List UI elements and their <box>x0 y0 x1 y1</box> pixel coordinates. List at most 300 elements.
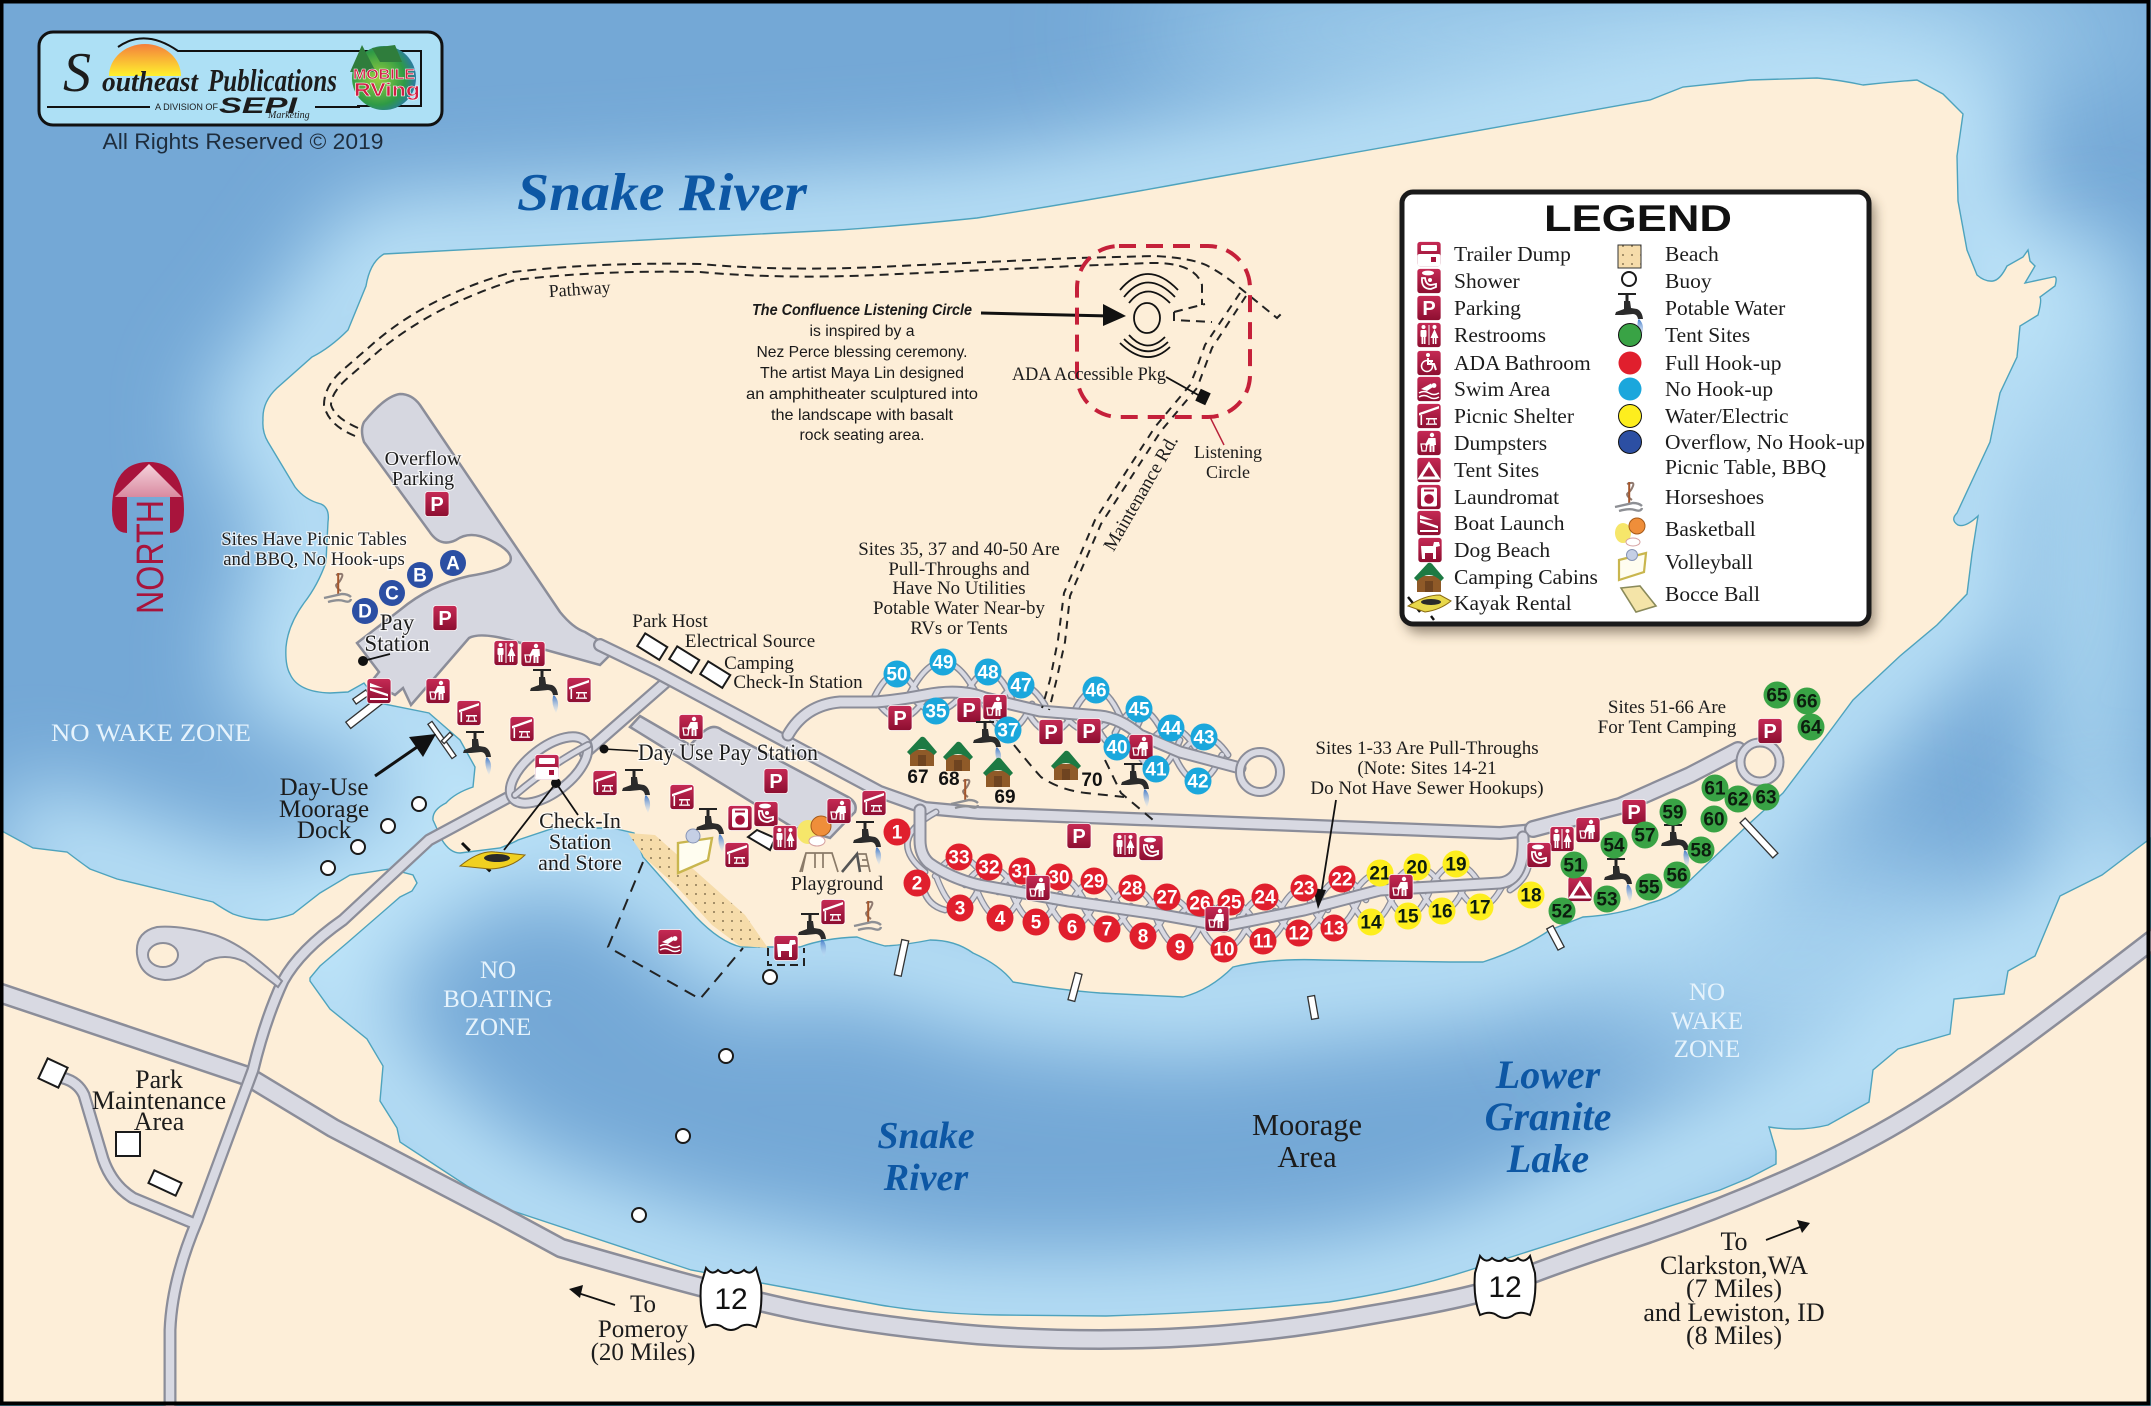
icon: highway shield 12 west <box>701 1268 761 1330</box>
land: north peninsula <box>263 78 2056 997</box>
arrow to pomeroy <box>569 1285 615 1305</box>
site 9: 9 <box>1175 938 1185 958</box>
label: to clarkston and lewiston: To <box>1720 1227 1748 1256</box>
legend: left labels: Parking <box>1454 296 1521 320</box>
site 49 <box>930 648 956 676</box>
label: picnic tables note: Sites Have Picnic Tables <box>221 529 407 550</box>
parking icons: P <box>1044 722 1058 744</box>
site 4: 4 <box>995 908 1006 930</box>
icon: kayak rental <box>460 843 525 879</box>
site 30 <box>1046 864 1072 890</box>
label: pathway: Pathway <box>548 277 611 301</box>
site 60 <box>1700 806 1728 832</box>
legend: right labels: Water/Electric <box>1665 404 1789 428</box>
legend: left labels: Camping Cabins <box>1454 565 1598 589</box>
site 40: 40 <box>1106 738 1128 758</box>
land: south and west shore <box>0 830 2151 1406</box>
arrow to moorage dock <box>375 734 436 776</box>
logo: Publications <box>207 62 337 98</box>
site C: C <box>385 584 399 604</box>
parking icons <box>425 492 1782 848</box>
site 63: 63 <box>1755 788 1777 808</box>
site 66: 66 <box>1796 692 1818 712</box>
site 28 <box>1118 874 1146 902</box>
sites: full hook-up <box>884 818 1356 962</box>
site 53: 53 <box>1596 890 1618 910</box>
site 10 <box>1210 936 1238 962</box>
legend title: LEGEND <box>1544 198 1732 239</box>
label: to clarkston and lewiston: Clarkston,WA <box>1660 1251 1808 1280</box>
label: maintenance road: Maintenance Rd. <box>1100 432 1183 555</box>
site 62 <box>1724 786 1752 812</box>
legend: left labels: Picnic Shelter <box>1454 404 1574 428</box>
site 58 <box>1688 836 1714 864</box>
label: snake river south: River <box>883 1157 969 1199</box>
site 51: 51 <box>1563 856 1585 876</box>
road: US highway 12 <box>0 938 2151 1339</box>
arrow to clarkston <box>1766 1220 1810 1240</box>
site 41 <box>1142 756 1170 782</box>
site 33: 33 <box>948 848 970 868</box>
site 31: 31 <box>1011 862 1033 882</box>
site 16: 16 <box>1431 902 1453 922</box>
dumpster icons over roads <box>1026 874 1413 932</box>
label: check-in station: Check-In Station <box>733 672 863 693</box>
label: playground: Playground <box>791 873 883 895</box>
label: overflow parking: Parking <box>392 468 454 490</box>
site 13: 13 <box>1323 918 1345 940</box>
site 5: 5 <box>1031 912 1042 934</box>
site 2 <box>904 870 930 896</box>
site B: B <box>413 566 427 586</box>
site 23: 23 <box>1293 878 1315 900</box>
site 51 <box>1560 852 1588 878</box>
site 42 <box>1184 768 1212 794</box>
sites text: sites 35, 37, 40-50 note: Pull-Throughs and <box>888 559 1030 580</box>
site 45 <box>1126 696 1152 722</box>
camping cabins: 69 <box>994 787 1016 808</box>
legend: right labels: Picnic Table, BBQ <box>1665 455 1827 479</box>
logo: Marketing <box>267 110 310 121</box>
pathway and maintenance road <box>324 256 1283 820</box>
horseshoe pits <box>324 573 978 930</box>
day use pay station marker <box>600 744 638 754</box>
legend: right labels: Basketball <box>1665 517 1756 541</box>
map amenity icons <box>367 640 1600 960</box>
beach <box>628 833 768 948</box>
logo: SEPI <box>219 93 298 118</box>
parking icons: P <box>1072 826 1086 848</box>
legend: right icons <box>1615 245 1656 612</box>
label: day-use moorage dock: Moorage <box>279 796 369 823</box>
sites text: confluence listening circle note: The artist Maya Lin designed <box>760 365 964 382</box>
site 28: 28 <box>1121 878 1143 900</box>
site 56: 56 <box>1666 866 1688 886</box>
labels: park maintenance area: Maintenance <box>92 1086 226 1115</box>
label: listening circle: Circle <box>1206 462 1250 482</box>
legend: right labels: No Hook-up <box>1665 377 1773 401</box>
site 46: 46 <box>1085 680 1107 702</box>
arrow to listening circle <box>981 304 1126 326</box>
check-in marker lines <box>504 778 578 850</box>
road: park entrance and maintenance area <box>63 683 665 1406</box>
legend: left icons <box>1408 242 1451 620</box>
boat docks <box>346 690 1778 1019</box>
north arrow: NORTH <box>130 500 172 614</box>
sites text: sites 35, 37, 40-50 note: Have No Utilities <box>892 578 1026 599</box>
logo: outheast <box>102 67 199 98</box>
label: day use pay station: Day Use Pay Station <box>638 740 818 766</box>
label: sites 1-33 note: Do Not Have Sewer Hookups) <box>1310 778 1544 799</box>
site 6: 6 <box>1067 918 1077 938</box>
labels: park maintenance area: Park <box>135 1065 183 1094</box>
site 8: 8 <box>1138 926 1148 948</box>
site 60: 60 <box>1703 810 1725 830</box>
site 20: 20 <box>1406 858 1428 878</box>
label: check-in station and store: and Store <box>538 850 622 875</box>
legend: left labels: Boat Launch <box>1454 511 1565 535</box>
site 65: 65 <box>1766 686 1788 706</box>
site D: D <box>358 602 372 622</box>
site 62: 62 <box>1727 790 1749 810</box>
label: tent camping note: For Tent Camping <box>1598 717 1737 738</box>
label: day-use moorage dock: Day-Use <box>280 774 368 801</box>
label: no wake zone west: NO WAKE ZONE <box>51 720 251 747</box>
site 18 <box>1518 882 1544 908</box>
legend: right labels: Buoy <box>1665 269 1712 293</box>
parking icons: P <box>1627 802 1641 824</box>
legend: left labels: Dumpsters <box>1454 431 1547 455</box>
ADA parking marker <box>1166 377 1211 405</box>
site 59: 59 <box>1662 802 1684 824</box>
site 9 <box>1166 934 1194 960</box>
site 48: 48 <box>977 662 999 684</box>
sites: overflow A-D <box>352 550 466 624</box>
site 46 <box>1082 676 1110 704</box>
site 43 <box>1190 724 1218 750</box>
pay station marker <box>363 654 390 661</box>
camping cabins <box>907 737 1103 808</box>
site 48 <box>974 658 1002 686</box>
legend: left labels: Dog Beach <box>1454 538 1550 562</box>
site 3 <box>946 894 974 922</box>
site 1 <box>884 818 910 846</box>
site 55 <box>1636 874 1662 900</box>
pay station dot <box>358 656 368 666</box>
label: no wake zone east: WAKE <box>1671 1008 1743 1035</box>
site 17 <box>1466 894 1494 920</box>
site 15 <box>1394 902 1422 930</box>
parking icons: P <box>893 708 907 730</box>
site 2: 2 <box>912 874 922 894</box>
site 35: 35 <box>925 702 947 722</box>
label: tent camping note: Sites 51-66 Are <box>1608 697 1726 718</box>
site 61: 61 <box>1704 778 1726 800</box>
label: to clarkston and lewiston: and Lewiston, ID <box>1643 1298 1825 1327</box>
site 13 <box>1320 914 1348 942</box>
site 52 <box>1548 898 1576 924</box>
site 58: 58 <box>1690 840 1712 862</box>
site 6 <box>1058 914 1086 940</box>
listening circle dashed boundary <box>1077 246 1250 417</box>
legend: right labels <box>1665 242 1865 606</box>
legend: right labels: Volleyball <box>1665 550 1753 574</box>
icon: volleyball <box>678 829 712 873</box>
site 14 <box>1358 908 1384 936</box>
sites text: confluence listening circle note: The Confluence Listening Circle <box>752 302 972 319</box>
legend: left labels: Kayak Rental <box>1454 591 1572 615</box>
site 37: 37 <box>997 720 1019 742</box>
label: camping: Camping <box>724 653 794 674</box>
site 66 <box>1794 688 1820 714</box>
site 63 <box>1752 784 1780 810</box>
site 57 <box>1632 822 1658 848</box>
site 24 <box>1252 884 1278 910</box>
sites text: confluence listening circle note: rock seating area. <box>800 427 924 444</box>
site 49: 49 <box>932 652 954 674</box>
label: no wake zone east: ZONE <box>1674 1036 1740 1063</box>
site 65 <box>1764 682 1790 708</box>
site 14: 14 <box>1360 912 1382 934</box>
site 1: 1 <box>892 822 903 844</box>
icon: highway shield 12 east <box>1475 1256 1535 1318</box>
site 4 <box>986 904 1014 932</box>
camping cabins: 67 <box>907 767 929 788</box>
site 43: 43 <box>1193 728 1215 748</box>
logo: MOBILE <box>353 66 415 83</box>
site 54 <box>1600 832 1628 858</box>
site 25: 25 <box>1220 892 1242 914</box>
site 50 <box>884 660 910 688</box>
parking icons: P <box>1082 721 1096 743</box>
site 7: 7 <box>1102 920 1112 940</box>
day use lot <box>630 716 856 838</box>
legend: left labels: Tent Sites <box>1454 458 1539 482</box>
site 18: 18 <box>1520 886 1542 906</box>
site 29: 29 <box>1083 872 1105 892</box>
sites text: sites 35, 37, 40-50 note: Sites 35, 37 and 40-50 Are <box>858 539 1060 560</box>
site 31 <box>1008 858 1036 884</box>
site 22: 22 <box>1331 870 1353 890</box>
site 11: 11 <box>1253 932 1273 952</box>
arrow to sites 1-33 <box>1313 800 1336 909</box>
site 53 <box>1594 886 1620 912</box>
site 27 <box>1154 884 1180 910</box>
label: to pomeroy: Pomeroy <box>598 1316 689 1343</box>
sites text: confluence listening circle note <box>746 302 978 444</box>
site 10: 10 <box>1213 940 1235 960</box>
site 56 <box>1664 862 1690 888</box>
site 8 <box>1130 922 1156 950</box>
legend: left labels: Trailer Dump <box>1454 242 1571 266</box>
legend: right labels: Horseshoes <box>1665 485 1764 509</box>
label: sites 1-33 note: (Note: Sites 14-21 <box>1357 758 1497 779</box>
site 27: 27 <box>1156 888 1178 908</box>
site 35 <box>922 698 950 724</box>
site 12 <box>1286 920 1312 946</box>
site 21: 21 <box>1369 864 1391 884</box>
label: no boating zone: BOATING <box>443 986 553 1013</box>
site 29 <box>1080 868 1108 894</box>
site 21 <box>1366 860 1394 886</box>
label: listening circle: Listening <box>1194 442 1262 462</box>
icon: highway shield 12 east: 12 <box>1488 1271 1522 1304</box>
sites text: confluence listening circle note: Nez Perce blessing ceremony. <box>756 344 968 361</box>
label: to clarkston and lewiston: (8 Miles) <box>1686 1321 1782 1350</box>
site 19: 19 <box>1445 854 1467 876</box>
site 17: 17 <box>1469 898 1491 918</box>
label: check-in station and store: Station <box>549 829 611 854</box>
label: sites 1-33 note: Sites 1-33 Are Pull-Throughs <box>1315 738 1539 759</box>
label: lower granite lake: Lower <box>1496 1052 1600 1097</box>
site 61 <box>1702 774 1728 802</box>
label: lower granite lake: Lake <box>1506 1136 1589 1181</box>
label: electrical source: Electrical Source <box>685 631 815 652</box>
parking icons: P <box>769 771 783 793</box>
legend: left labels: Restrooms <box>1454 323 1546 347</box>
parking icons: P <box>962 700 976 722</box>
site 44 <box>1158 714 1184 742</box>
road: north loop with pull-through sites 35-50 <box>788 662 1280 792</box>
road: tent and RV loop with pull-through sites 1-33 <box>907 810 1529 949</box>
label: no wake zone east: NO <box>1689 979 1725 1006</box>
site 15: 15 <box>1397 906 1419 928</box>
sites: water and electric <box>1358 850 1544 936</box>
site 44: 44 <box>1160 718 1182 740</box>
label: day-use moorage dock: Dock <box>297 817 352 844</box>
site 33 <box>946 844 972 870</box>
north arrow <box>112 462 184 614</box>
legend: right labels: Potable Water <box>1665 296 1785 320</box>
label: no boating zone: NO <box>480 957 516 984</box>
label: to pomeroy: To <box>630 1291 656 1318</box>
legend: right labels: Beach <box>1665 242 1719 266</box>
logo: RVing <box>354 80 420 100</box>
potable water faucets <box>463 669 1689 957</box>
site 37 <box>994 716 1022 744</box>
parking icons: P <box>438 608 452 630</box>
overflow parking and main lot <box>357 394 615 705</box>
icon: playground equipment <box>800 853 870 872</box>
site 42: 42 <box>1187 772 1209 792</box>
site 55: 55 <box>1638 878 1660 898</box>
label: pay station: Station <box>364 631 430 656</box>
sites text: sites 35, 37, 40-50 note: RVs or Tents <box>910 618 1008 639</box>
logo <box>39 32 442 125</box>
site 32: 32 <box>978 858 1000 878</box>
site 24: 24 <box>1254 888 1276 908</box>
legend: left labels: Shower <box>1454 269 1520 293</box>
site 19 <box>1442 850 1470 878</box>
label: moorage area: Moorage <box>1252 1108 1362 1142</box>
site 7 <box>1094 916 1120 942</box>
legend: right labels: Bocce Ball <box>1665 582 1760 606</box>
legend: right labels: Full Hook-up <box>1665 351 1781 375</box>
label: park host: Park Host <box>632 611 708 632</box>
label: moorage area: Area <box>1277 1140 1337 1174</box>
site 32 <box>976 854 1002 880</box>
sites: no hook-up <box>884 648 1218 794</box>
label: to pomeroy: (20 Miles) <box>591 1339 695 1366</box>
logo: S <box>63 42 91 104</box>
logo: A DIVISION OF <box>155 102 219 112</box>
label: ADA accessible parking: ADA Accessible Pkg <box>1012 364 1166 385</box>
icon: highway shield 12 west: 12 <box>714 1283 748 1316</box>
site 47: 47 <box>1010 676 1032 696</box>
legend: right labels: Overflow, No Hook-up <box>1665 430 1865 454</box>
label: picnic tables note: and BBQ, No Hook-ups <box>223 549 405 570</box>
site 23 <box>1290 874 1318 902</box>
legend: left labels: ADA Bathroom <box>1454 351 1591 375</box>
site A: A <box>446 554 460 574</box>
site 50: 50 <box>886 664 908 686</box>
panel: legend <box>1402 192 1875 633</box>
sites text: confluence listening circle note: is inspired by a <box>810 323 915 340</box>
label: to clarkston and lewiston: (7 Miles) <box>1686 1274 1782 1303</box>
site 3: 3 <box>955 898 965 920</box>
copyright: All Rights Reserved © 2019 <box>102 129 384 154</box>
label: overflow parking: Overflow <box>385 448 461 470</box>
icon: listening circle amphitheater <box>1120 274 1178 357</box>
camping cabins: 68 <box>938 769 960 790</box>
legend: right labels: Tent Sites <box>1665 323 1750 347</box>
site 12: 12 <box>1288 924 1310 944</box>
site 54: 54 <box>1603 836 1625 856</box>
site 30: 30 <box>1048 868 1070 888</box>
labels: park maintenance area: Area <box>134 1107 185 1136</box>
buoys <box>321 797 777 1222</box>
heading: Snake River north: Snake River <box>517 164 808 222</box>
label: check-in station and store: Check-In <box>539 808 621 833</box>
dashed swim area <box>608 862 743 999</box>
site 47 <box>1008 672 1034 698</box>
legend: left labels: Swim Area <box>1454 377 1551 401</box>
parking icons: P <box>430 494 444 516</box>
sites text: sites 35, 37, 40-50 note: Potable Water Near-by <box>873 598 1045 619</box>
site 64: 64 <box>1800 718 1822 738</box>
site 11 <box>1250 928 1276 954</box>
site 26: 26 <box>1189 894 1211 914</box>
sites text: confluence listening circle note: an amphitheater sculptured into <box>746 386 978 403</box>
site 5 <box>1022 908 1050 936</box>
site 25 <box>1218 888 1244 916</box>
icon: basketball <box>797 816 831 846</box>
label: lower granite lake: Granite <box>1485 1094 1611 1139</box>
site 64 <box>1798 714 1824 740</box>
site 16 <box>1428 898 1456 924</box>
site 45: 45 <box>1128 700 1150 720</box>
site 22 <box>1328 866 1356 892</box>
site 59 <box>1660 798 1686 826</box>
parking icons: P <box>1763 721 1777 743</box>
sites text: confluence listening circle note: the landscape with basalt <box>771 407 954 424</box>
sites: tent <box>1548 682 1824 924</box>
site 41: 41 <box>1145 760 1167 780</box>
label: pay station: Pay <box>380 610 414 635</box>
site 26 <box>1186 890 1214 916</box>
dashed dog beach area <box>768 948 804 965</box>
legend: left labels <box>1454 242 1598 615</box>
site 52: 52 <box>1551 902 1573 922</box>
label: snake river south: Snake <box>877 1115 975 1157</box>
site 57: 57 <box>1634 826 1656 846</box>
site 40 <box>1104 734 1130 760</box>
listening circle leader line <box>1210 417 1224 445</box>
legend: left labels: Laundromat <box>1454 485 1559 509</box>
label: no boating zone: ZONE <box>465 1014 531 1041</box>
legend: left icons: P <box>1422 298 1436 320</box>
small buildings <box>38 633 775 1196</box>
